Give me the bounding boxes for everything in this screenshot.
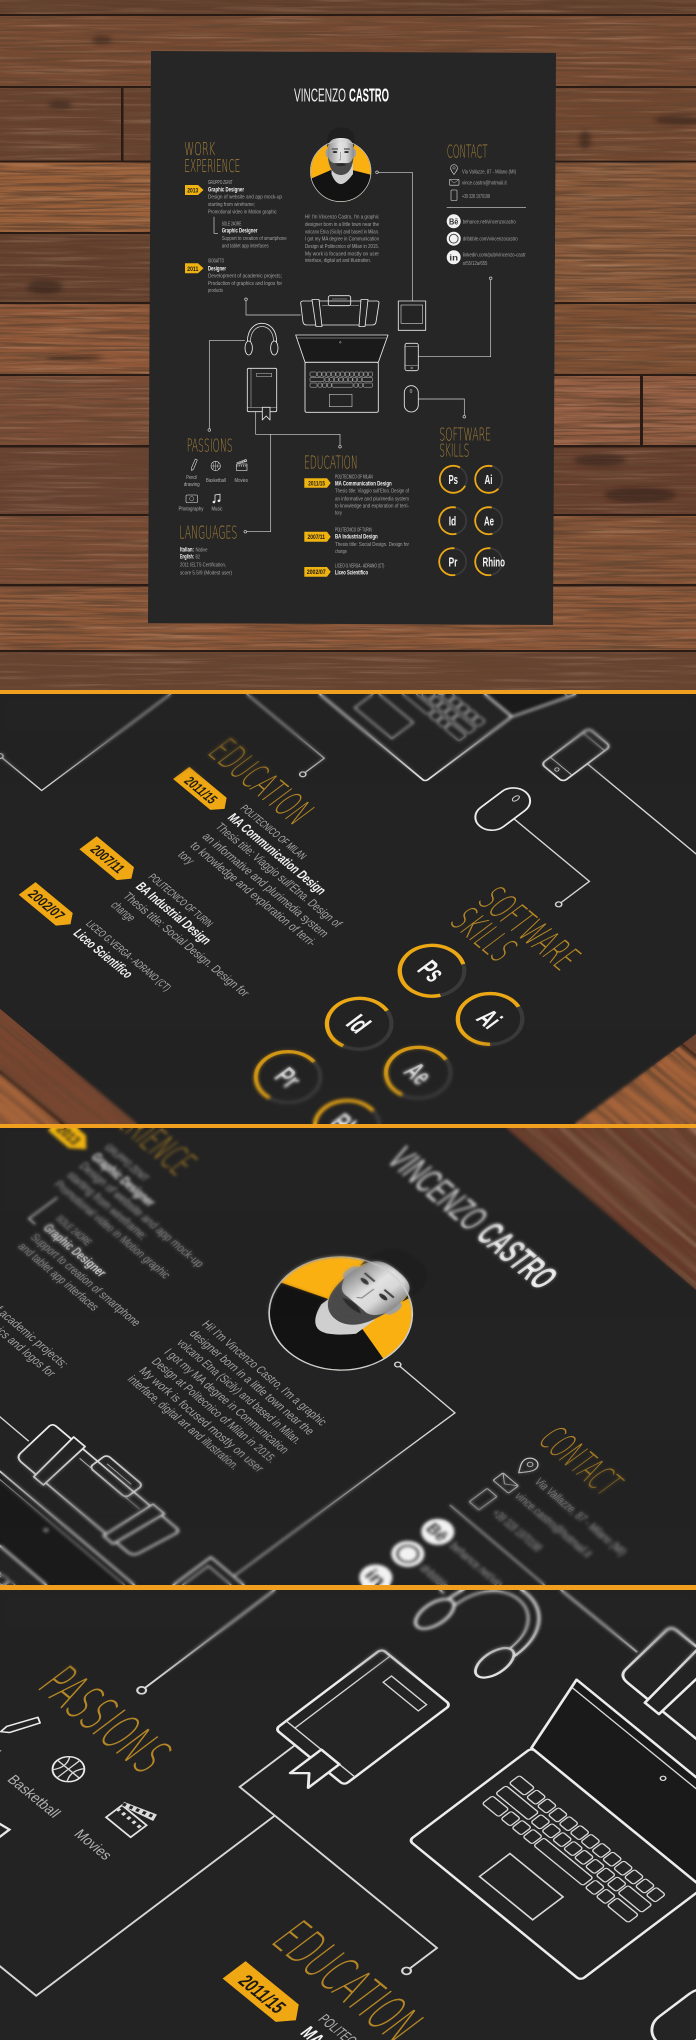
work experience section: SOLE 24ORE (222, 221, 242, 227)
education section: 2011/15 (180, 775, 220, 807)
education section: 2007/11 (308, 534, 325, 541)
bio paragraph: volcano Etna (Sicily) and based in Milan. (305, 229, 379, 235)
icon: bag (301, 296, 379, 326)
work experience section: Graphic Designer (88, 1150, 159, 1209)
education section: 2011/15 (233, 1972, 290, 2017)
icon: mouse (404, 386, 418, 412)
contact section: Bē (422, 1520, 452, 1544)
software skills section (232, 874, 617, 1172)
work experience section: GIOGATTO (208, 259, 224, 265)
education section (18, 732, 407, 1037)
portrait photo (230, 1213, 467, 1399)
work experience section: SOLE 24ORE (53, 1214, 94, 1248)
icon: mouse (642, 1981, 696, 2040)
bio paragraph: interface, digital art and illustration. (124, 1373, 243, 1472)
work experience section (184, 139, 287, 294)
connector lines (0, 236, 696, 1093)
work experience section: Support to creation of smartphone (27, 1231, 144, 1329)
panel: close-up portrait, bio and contact (0, 1128, 696, 1585)
passions section: drawing (184, 482, 200, 488)
education section: Liceo Scientifico (335, 570, 368, 577)
work experience section: GRUPPO ZENIT (101, 1142, 151, 1184)
software skills section: Rhino (482, 554, 505, 569)
panel: close-up education and software skills (0, 694, 696, 1124)
education section: Thesis title: Social Design. Design for (335, 542, 409, 548)
contact section (447, 141, 526, 267)
passions section: PASSIONS (25, 1656, 184, 1783)
education section: Liceo Scientifico (70, 927, 136, 981)
contact section: dribbble.com/vincenzocastro (463, 237, 518, 243)
bio paragraph: Hi! I'm Vincenzo Castro, I'm a graphic (305, 215, 379, 221)
passions section: Photography (178, 507, 204, 513)
work experience section: products (208, 288, 223, 294)
passions section: PASSIONS (187, 436, 233, 457)
software skills section: Ae (398, 1057, 439, 1090)
education section: EDUCATION (198, 732, 323, 833)
icon: laptop (387, 1680, 696, 1999)
icon: headphones (409, 1561, 564, 1683)
education section: tory (175, 849, 198, 867)
education section: Thesis title: Viaggio sull'Etna. Design of (335, 489, 409, 495)
icon: bag (609, 1616, 696, 1823)
education section: LICEO G.VERGA - ADRANO (CT) (83, 919, 173, 993)
contact section: Bē (449, 217, 459, 226)
contact section: +39 328 1970198 (489, 1507, 546, 1554)
contact section: linkedin.com/pub/vincenzo-castr (463, 253, 526, 259)
software skills section: Ai (484, 472, 492, 487)
education section: POLITECNICO OF MILAN (335, 474, 373, 480)
education section (304, 452, 409, 577)
bio paragraph (124, 1318, 330, 1483)
education section: an informative and plurimedia system (335, 496, 409, 502)
bio paragraph: My work is focused mostly on user (136, 1365, 267, 1474)
wood corner (466, 1015, 696, 1349)
work experience section: starting from wireframe; (64, 1169, 151, 1242)
work experience section: EXPERIENCE (184, 156, 240, 177)
work experience section: and tablet app interfaces (222, 243, 269, 249)
education section: POLITECNICO OF MILAN (237, 803, 309, 862)
work experience section: 2013 (187, 188, 199, 194)
work experience section: Graphic Designer (222, 228, 258, 235)
work experience section: and tablet app interfaces (15, 1240, 102, 1313)
languages section: Italian: (180, 547, 194, 554)
icon: bag (9, 1417, 189, 1563)
education section: 2002/07 (307, 569, 326, 576)
passions section (0, 1655, 220, 1900)
work experience section: WORK (184, 139, 215, 160)
passions section (178, 436, 248, 513)
software skills section: SKILLS (439, 441, 469, 462)
work experience section: Graphic Designer (40, 1221, 110, 1279)
panel: full poster on wood floor (0, 0, 696, 690)
passions section: Music (212, 507, 223, 513)
icon: notebook (255, 1649, 451, 1801)
bio paragraph: interface, digital art and illustration. (305, 258, 371, 264)
icon: laptop (0, 1460, 136, 1684)
bio paragraph: volcano Etna (Sicily) and based in Milan. (174, 1337, 305, 1447)
education section: change (108, 899, 139, 924)
education section: an informative and plurimedia system (199, 831, 332, 940)
passions section: Movies (70, 1827, 116, 1863)
education section: BA Industrial Design (133, 880, 215, 947)
work experience section: Design of website and app mock-up (208, 195, 282, 201)
panel: close-up devices, passions and education (0, 1590, 696, 2040)
languages section: Native (196, 548, 208, 554)
languages section: B2 (196, 555, 200, 561)
education section: tory (335, 510, 342, 516)
bio paragraph: I got my MA degree in Communication (161, 1346, 292, 1456)
work experience section: starting from wireframe; (208, 202, 255, 208)
contact section: CONTACT (447, 141, 488, 162)
software skills section: Ps (411, 955, 452, 987)
education section: 2002/07 (24, 888, 68, 923)
languages section: English: (180, 554, 194, 561)
divider bar 2 (0, 1124, 696, 1128)
title: CASTRO (349, 86, 389, 106)
education section: POLITECNICO OF TURIN (335, 527, 372, 533)
title: CASTRO (467, 1216, 566, 1296)
software skills section: Id (340, 1009, 377, 1038)
contact section: vince.castro@hotmail.it (512, 1490, 596, 1560)
work experience section: Design of website and app mock-up (76, 1160, 207, 1270)
education section: 2011/15 (308, 481, 325, 488)
software skills section: Pr (268, 1062, 308, 1093)
contact section: Via Vallazze, 87 - Milano (MI) (462, 169, 516, 175)
passions section: Basketball (3, 1772, 64, 1821)
education section: MA Communication Design (335, 481, 392, 488)
contact section: o/55/12a/655 (463, 261, 487, 267)
bio paragraph: Design at Politecnico of Milan in 2015. (305, 244, 379, 250)
icon: notebook (247, 368, 277, 420)
wood floor background (0, 0, 696, 692)
connector lines (0, 1131, 586, 1980)
bio paragraph (305, 215, 379, 264)
divider bar 1 (0, 690, 696, 694)
education section: to knowledge and exploration of terri- (335, 503, 409, 509)
bio paragraph: My work is focused mostly on user (305, 251, 379, 257)
icon: picture frame (161, 1557, 255, 1632)
poster sheet (0, 897, 696, 2040)
education section: EDUCATION (304, 452, 358, 473)
software skills section (435, 425, 508, 577)
bio paragraph: Design at Politecnico of Milan in 2015. (149, 1355, 280, 1465)
work experience section: Production of graphics and logos for (208, 281, 282, 287)
work experience section: Support to creation of smartphone (222, 236, 287, 242)
contact section: vince.castro@hotmail.it (462, 181, 507, 187)
icon: headphones (245, 323, 278, 355)
software skills section: Ps (448, 472, 458, 487)
education section: LICEO G.VERGA - ADRANO (CT) (335, 563, 385, 569)
bio paragraph: designer born in a little town near the (305, 222, 379, 228)
education section: Thesis title: Viaggio sull'Etna. Design of (212, 821, 345, 930)
connector lines (0, 1209, 696, 2040)
icon: mouse (468, 782, 537, 836)
contact section: in (449, 252, 458, 262)
poster sheet (148, 51, 556, 625)
title: VINCENZO (378, 1141, 497, 1237)
bio paragraph: designer born in a little town near the (186, 1328, 318, 1437)
software skills section: Ae (484, 513, 494, 528)
icon: picture frame (398, 301, 426, 330)
icon: notebook (197, 546, 335, 654)
bio paragraph: I got my MA degree in Communication (305, 237, 379, 243)
poster sheet (0, 0, 696, 1300)
education section: BA Industrial Design (335, 534, 378, 541)
languages section (179, 522, 237, 576)
languages section: score 5.5/9 (Modest user) (180, 570, 232, 576)
education section: to knowledge and exploration of terri- (187, 840, 320, 949)
contact section: +39 328 1970198 (462, 194, 490, 200)
bio paragraph: Hi! I'm Vincenzo Castro, I'm a graphic (199, 1318, 330, 1428)
passions section: Movies (235, 478, 248, 484)
work experience section (0, 1079, 280, 1386)
contact section: Via Vallazze, 87 - Milano (MI) (531, 1476, 630, 1558)
contact section: behance.net/vincenzocastro (463, 219, 516, 225)
education section: 2007/11 (86, 843, 128, 876)
work experience section: Development of academic projects; (208, 274, 282, 280)
connector lines (208, 171, 492, 533)
work experience section: Promotional video in Motion graphic (51, 1178, 174, 1281)
divider bar 3 (0, 1585, 696, 1590)
icon: smartphone (405, 343, 418, 371)
languages section: LANGUAGES (179, 522, 237, 543)
work experience section: Graphic Designer (208, 187, 244, 194)
wood corners (0, 659, 696, 1525)
work experience section: GRUPPO ZENIT (208, 180, 233, 186)
software skills section: SOFTWARE (439, 425, 491, 446)
education section: POLITECNICO OF TURIN (145, 872, 215, 929)
icon: laptop (296, 335, 388, 412)
icon: laptop (290, 569, 575, 795)
passions section: Pencil (186, 475, 197, 481)
education section: Thesis title: Social Design. Design for (120, 890, 253, 999)
passions section: Basketball (206, 478, 226, 484)
software skills section: Ai (470, 1004, 508, 1034)
languages section: 2011 IELTS Certification, (180, 563, 226, 569)
software skills section: SKILLS (440, 901, 526, 969)
portrait photo (308, 128, 372, 205)
work experience section: 2011 (187, 266, 199, 273)
work experience section: Designer (208, 266, 226, 273)
contact section (352, 1420, 693, 1685)
software skills section: SOFTWARE (468, 880, 589, 978)
education section: MA Communication Design (224, 811, 330, 897)
work experience section: Promotional video in Motion graphic (208, 209, 277, 215)
software skills section: Id (449, 513, 456, 528)
icon: smartphone (541, 728, 611, 782)
software skills section: Pr (448, 554, 458, 569)
education section: change (335, 549, 347, 555)
title: VINCENZO (294, 86, 346, 106)
